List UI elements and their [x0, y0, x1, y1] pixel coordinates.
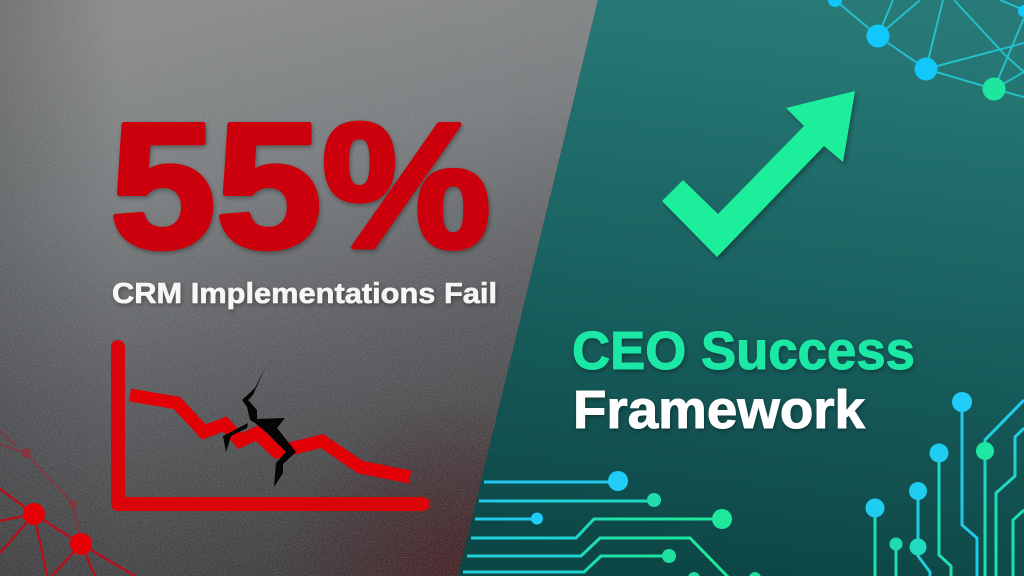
subheading: CRM Implementations Fail: CRM Implementations Fail — [112, 278, 497, 310]
network: bottom-left red nodes — [0, 431, 135, 576]
panel: success side (teal) — [458, 0, 1024, 576]
circuit: bottom-right traces — [866, 392, 1024, 576]
network: top-right nodes — [828, 0, 1024, 100]
icon: green check-arrow — [662, 91, 855, 257]
heading: CEO Success: CEO Success — [572, 321, 915, 381]
big statistic: 55%: 55% — [110, 86, 491, 285]
heading: Framework: Framework — [573, 380, 866, 440]
crack — [223, 366, 296, 487]
chart: declining line with crack — [118, 347, 423, 504]
declining trend line — [130, 395, 410, 477]
circuit: bottom-centre traces — [463, 471, 761, 576]
chart axes — [118, 347, 423, 504]
panel: failure side (grey) — [0, 0, 598, 576]
